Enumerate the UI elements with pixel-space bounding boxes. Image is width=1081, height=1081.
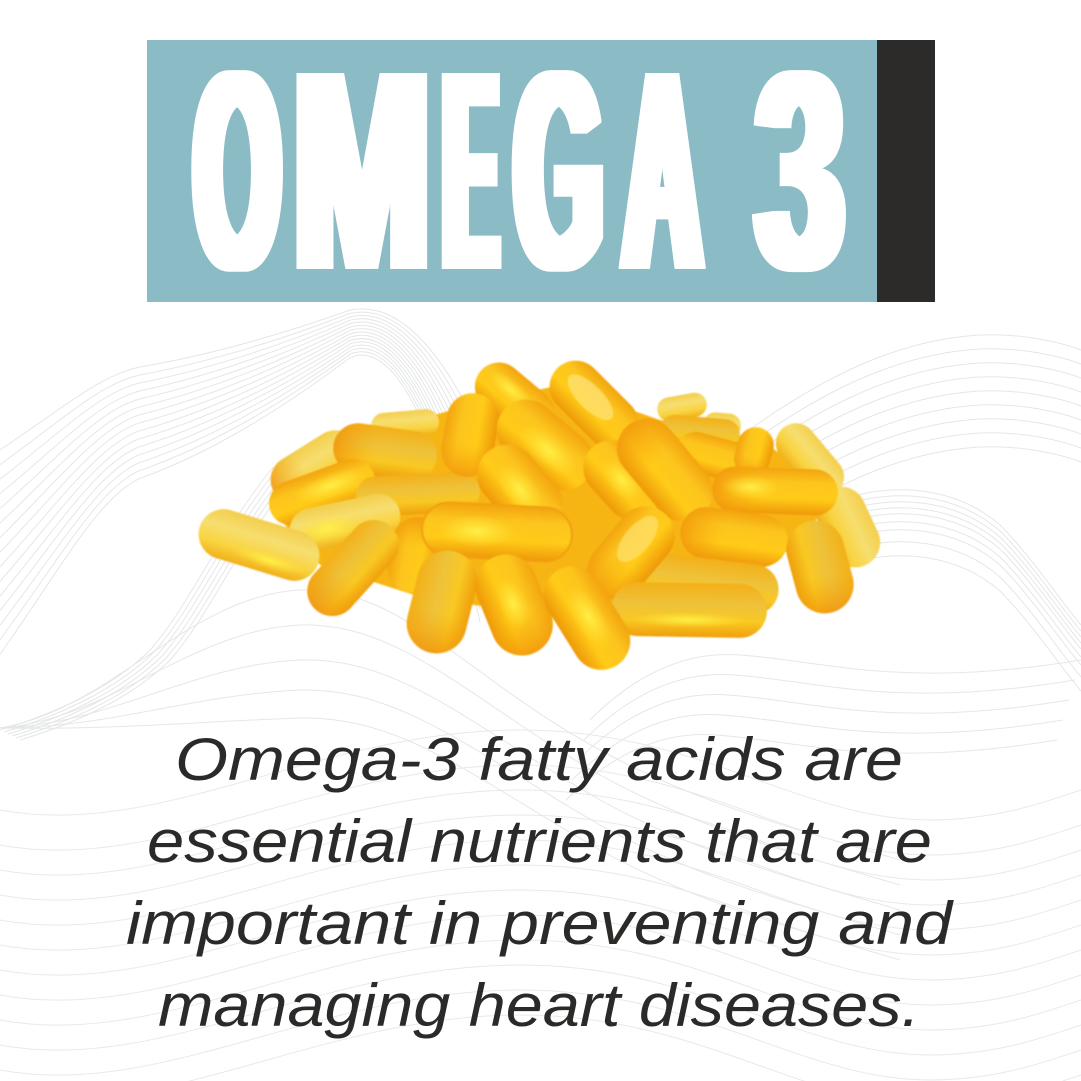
image: pile of omega-3 softgel capsules: [192, 350, 888, 681]
title: OMEGA 3: G: [515, 14, 602, 328]
text line 2: essential nutrients that are: [147, 808, 932, 875]
title banner: [147, 12, 935, 329]
description paragraph: [126, 726, 954, 1039]
background wave lines: [0, 309, 1081, 1081]
title: OMEGA 3: [195, 12, 844, 329]
title: OMEGA 3: O: [195, 13, 280, 329]
text line 1: Omega-3 fatty acids are: [175, 726, 903, 793]
title: OMEGA 3: M: [294, 12, 430, 328]
title: OMEGA 3: A: [624, 14, 701, 329]
title: OMEGA 3: E: [444, 13, 497, 328]
text line 4: managing heart diseases.: [158, 972, 920, 1039]
title: OMEGA 3: 3: [756, 13, 844, 329]
banner dark end block: [877, 40, 935, 302]
banner teal panel: [147, 40, 877, 302]
text line 3: important in preventing and: [126, 890, 954, 957]
